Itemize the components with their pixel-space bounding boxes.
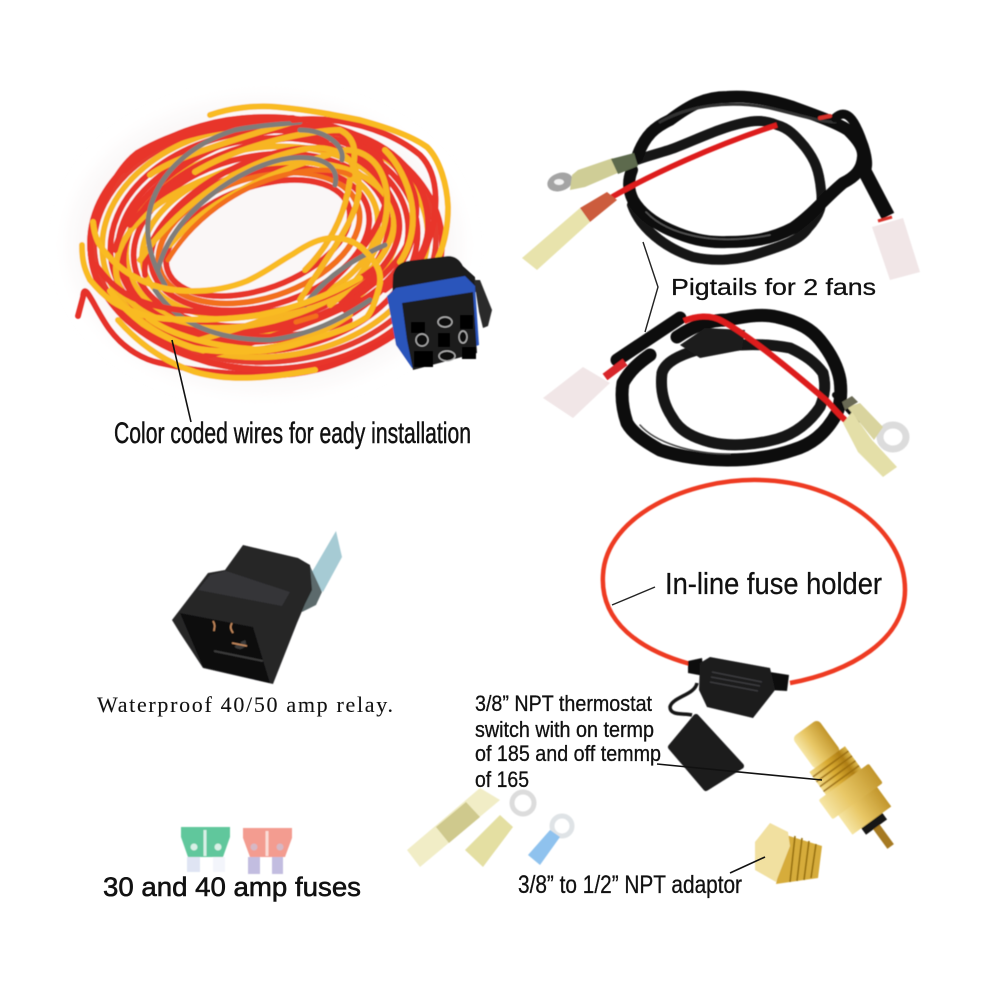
spade terminal (522, 192, 617, 270)
panel: upper pigtail (522, 97, 920, 280)
label: in-line fuse holder: In-line fuse holder (665, 566, 882, 601)
holder body (699, 657, 775, 718)
holder stub left (688, 658, 704, 676)
sensor lower cylinder (838, 787, 891, 835)
socket front face (402, 292, 477, 370)
outer yellow wires (82, 106, 448, 378)
relay top band (198, 571, 290, 606)
outer red wire bundle (78, 118, 436, 375)
label: relay: Waterproof 40/50 amp relay. (97, 692, 393, 717)
red wire (612, 125, 777, 197)
pointer: fuse holder (612, 587, 655, 605)
white connector (872, 217, 920, 280)
panel: lower pigtail (543, 315, 906, 477)
sensor stud (873, 825, 894, 849)
inner wires, orange (168, 170, 350, 322)
adaptor thread (776, 835, 822, 884)
inner wires, yellow (140, 122, 413, 350)
panel: blade fuses (181, 827, 292, 874)
label: thermostat switch (475, 691, 661, 792)
adaptor thread lines (790, 836, 816, 882)
red stub (605, 362, 625, 377)
pointer: pigtails bracket (643, 242, 658, 332)
pointer: thermostat (657, 764, 822, 780)
socket terminals (411, 315, 476, 367)
label: colour coded wires: Color coded wires for eady installation (114, 417, 471, 450)
label: adaptor: 3/8” to 1/2” NPT adaptor (518, 871, 742, 899)
label: thermostat switch: switch with on termp (475, 717, 654, 742)
butt connector (407, 788, 500, 867)
relay inner ledge (214, 651, 263, 661)
sensor hex (819, 764, 883, 819)
fuse cap (671, 717, 741, 788)
relay socket (387, 256, 492, 370)
ring terminal blue (528, 816, 572, 865)
socket clip (474, 280, 492, 328)
concentric wire turns (90, 105, 442, 369)
socket blue seal (387, 276, 479, 368)
black wrap blob (680, 328, 745, 358)
sensor insulator (861, 813, 887, 835)
panel: NPT adaptor (755, 823, 822, 884)
red wire (684, 316, 850, 424)
holder stub right (769, 672, 789, 691)
panel: waterproof relay (172, 531, 342, 684)
panel: colour coded wire coil with relay socket (70, 100, 492, 390)
label: thermostat switch: 3/8” NPT thermostat (475, 691, 652, 716)
holder ribs (710, 672, 762, 691)
pointer: colour coded wires (172, 340, 191, 422)
ring terminal yellow (465, 792, 534, 867)
relay bracket (308, 531, 342, 592)
black wire loops (617, 315, 858, 460)
red wire loop (603, 480, 905, 683)
black wire loops (629, 97, 888, 260)
adaptor hex (755, 823, 790, 882)
panel: thermostat switch (780, 710, 916, 865)
green fuse (181, 827, 230, 872)
relay body (172, 545, 312, 684)
pink fuse (243, 828, 292, 874)
relay clip (296, 566, 322, 612)
label: thermostat switch: of 165 (475, 767, 529, 792)
panel: crimp terminals (407, 788, 572, 867)
socket black hood (392, 256, 476, 300)
spade and ring terminals (842, 396, 906, 477)
label: thermostat switch: of 185 and off temmp (475, 741, 661, 766)
ring terminal (545, 153, 638, 195)
label: fuses: 30 and 40 amp fuses (103, 872, 361, 902)
inner wires, red and orange (115, 125, 428, 358)
sensor thread (809, 746, 861, 795)
sensor top cylinder (792, 719, 841, 770)
white connector (543, 367, 610, 418)
panel: in-line fuse holder (603, 480, 905, 788)
inner wires, grey (148, 122, 385, 340)
label: pigtails: Pigtails for 2 fans (671, 274, 876, 300)
sensor thread lines (813, 751, 859, 791)
relay opening (180, 613, 270, 683)
holder strap (670, 683, 697, 715)
pointer: adaptor (730, 857, 765, 873)
wire shadow (70, 100, 460, 390)
relay pins (213, 621, 247, 646)
